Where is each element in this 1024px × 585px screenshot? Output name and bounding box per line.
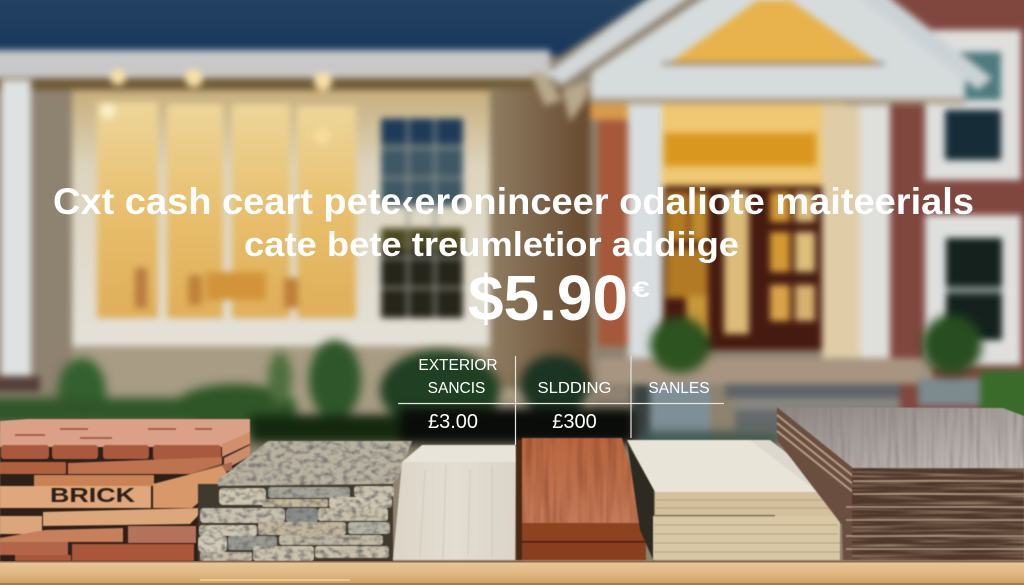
door	[664, 186, 822, 350]
column: exterior sancis: EXTERIOR	[418, 357, 498, 374]
column: sanles: SANLES	[648, 380, 710, 397]
stone top slab	[218, 441, 412, 486]
porch brick	[598, 118, 630, 346]
dark side window	[381, 118, 463, 318]
headline line 2: cate bete treumletior addiige	[244, 226, 739, 264]
big price: $5.90	[468, 262, 628, 334]
grass	[980, 370, 1024, 420]
column: siding	[538, 380, 612, 433]
table rules	[398, 356, 724, 445]
right brick wall	[890, 0, 1024, 415]
column: siding: £300	[552, 411, 597, 433]
labelled brick	[0, 485, 151, 508]
porch columns	[628, 100, 662, 368]
lower wall	[72, 346, 592, 418]
main window frame	[72, 90, 490, 346]
gable	[530, 0, 992, 122]
porch interior	[660, 96, 845, 191]
labelled brick: BRICK	[50, 485, 136, 507]
grey composite stack	[777, 407, 1024, 560]
wooden table	[0, 561, 1024, 585]
headline	[53, 181, 974, 334]
brick side bricks	[222, 432, 250, 457]
white wood block	[393, 445, 516, 560]
brick stack	[0, 419, 250, 562]
red wood plank	[516, 438, 646, 560]
eave	[0, 50, 550, 78]
porch floor and steps	[598, 358, 980, 440]
stone courses	[198, 486, 394, 561]
brick front row	[1, 445, 221, 460]
left column	[1, 80, 31, 376]
brick top surface	[0, 419, 250, 447]
cream panel stack	[627, 440, 840, 562]
stone stack	[198, 441, 412, 562]
blurred shrubs	[0, 315, 982, 444]
window panes	[97, 102, 356, 318]
price table	[398, 356, 724, 445]
column: exterior sancis	[418, 357, 498, 433]
headline line 1: Cxt cash ceart pete‹eroninceer odaliote maiteerials	[53, 181, 974, 222]
column: siding: SLDDING	[538, 380, 612, 397]
downlights	[110, 69, 332, 90]
column: exterior sancis: SANCIS	[428, 380, 485, 397]
column: exterior sancis: £3.00	[428, 411, 478, 433]
roof	[0, 0, 660, 56]
euro mark: €	[632, 277, 650, 302]
right windows	[925, 30, 1021, 365]
